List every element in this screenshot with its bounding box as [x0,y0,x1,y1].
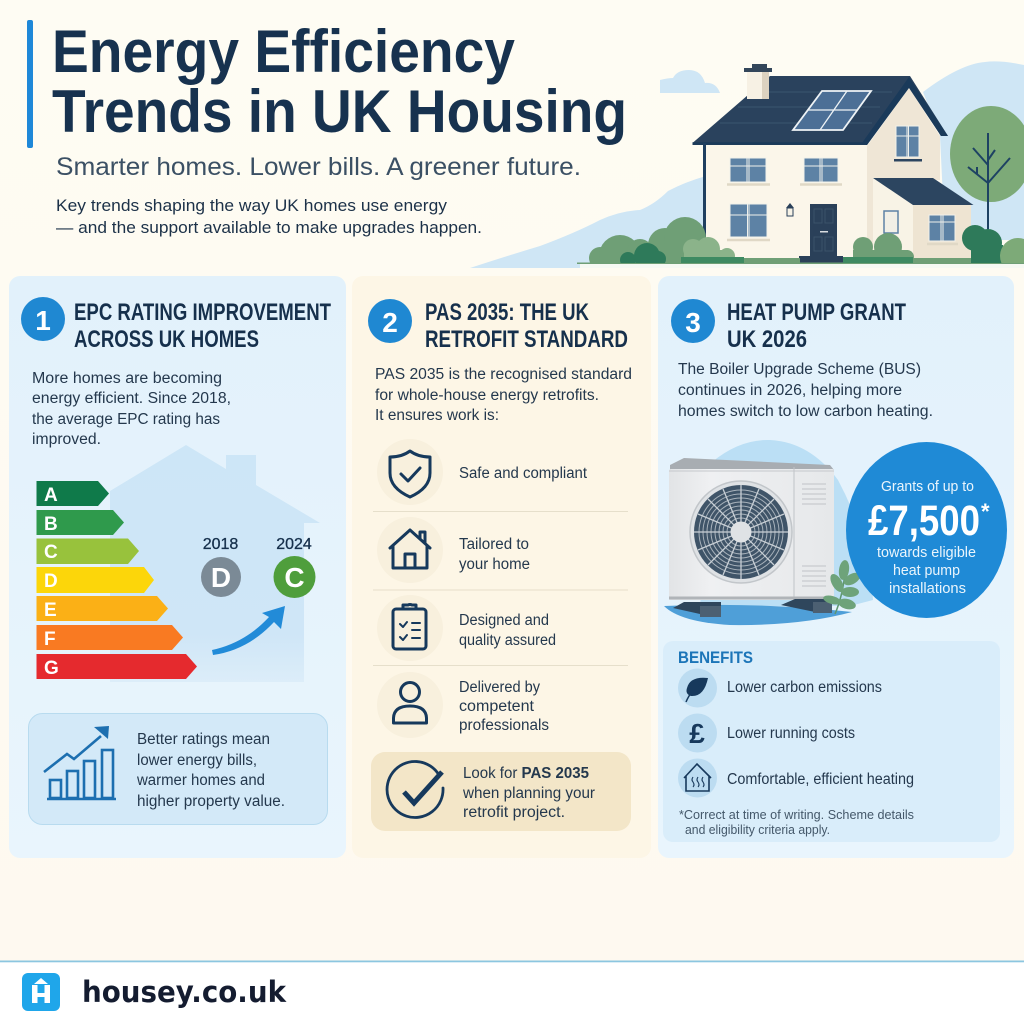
panel 2 intro [375,366,632,424]
panel 3 heading: HEAT PUMP GRANT [727,299,906,326]
subtitle: Smarter homes. Lower bills. A greener future. [56,153,581,181]
divider [373,589,628,591]
callout text: Better ratings mean [137,731,270,748]
main roof [692,76,948,145]
callout text: warmer homes and [136,772,265,789]
grant badge: heat pump [893,563,960,579]
2024 rating: 2024 [276,536,312,553]
number badge 1: 1 [35,305,51,336]
left shrub base [681,257,744,263]
item: designed and quality assured: quality assured [459,632,556,649]
2024 rating: C [284,562,305,593]
item: tailored to your home: your home [459,556,530,573]
divider [373,664,628,666]
footnote [679,808,914,837]
grant badge: £7,500 [868,497,980,545]
backdrop blob [700,440,873,606]
band A: A [44,485,58,506]
item: safe and compliant [377,439,588,505]
title [52,18,627,145]
main wall [705,143,868,263]
panel 1: EPC rating improvement [9,276,346,858]
item: delivered by competent professionals: Delivered by [459,679,540,696]
icon: check circle [387,761,443,817]
gable wall [867,88,940,180]
left shrub group [589,217,706,262]
grant badge: Grants of up to [881,479,974,495]
panel 3 intro: The Boiler Upgrade Scheme (BUS) [678,361,921,378]
item: designed and quality assured: Designed and [459,612,549,629]
footnote: and eligibility criteria apply. [685,823,830,837]
logo icon [22,973,60,1011]
gable sill [894,159,922,162]
pale strip under ground [580,264,1024,268]
callout text: when planning your [462,785,595,802]
item: tailored to your home: Tailored to [459,536,529,553]
benefit: lower costs: £ [689,718,705,749]
title: Trends in UK Housing [52,78,627,145]
band E [36,596,168,621]
band B [36,510,124,535]
icon: rising bar chart [44,726,116,799]
window sills [727,184,958,244]
grant badge: towards eligible [877,545,976,561]
downpipe [703,143,706,241]
door [799,204,843,263]
grant badge: * [981,499,990,524]
benefits box [663,641,1000,842]
band D [36,567,154,593]
2018 rating [201,536,241,597]
callout: look for PAS 2035 [371,752,631,831]
intro text: Key trends shaping the way UK homes use energy [56,197,448,215]
ground [577,258,1024,264]
arrow: improvement [212,606,285,655]
chimney [744,64,772,99]
fan [690,481,792,583]
mounting feet [673,599,832,617]
footer bar [0,960,1024,1024]
item: safe and compliant: Safe and compliant [459,465,588,482]
callout text: retrofit project. [463,804,565,821]
background hill left [470,176,706,268]
left light shrub [683,237,735,257]
extension wall [867,178,971,263]
grant badge: installations [889,581,966,597]
divider [373,510,628,512]
band B: B [44,514,58,535]
benefit: lower costs [678,714,855,752]
number badge 3: 3 [685,307,701,338]
panel 2 heading [425,299,628,353]
item: delivered by competent professionals: competent [459,698,535,715]
panel 3 intro: continues in 2026, helping more [678,382,902,399]
panel 3: heat pump grant [658,276,1014,858]
grant badge [846,442,1007,618]
panel 2 heading: RETROFIT STANDARD [425,326,628,353]
2018 rating: D [211,562,231,593]
windows [730,126,955,241]
band A [36,481,109,506]
callout text: lower energy bills, [137,752,257,769]
number badge 2: 2 [382,307,398,338]
2024 rating [274,536,316,598]
benefits heading: BENEFITS [678,648,753,667]
band C: C [44,542,58,563]
footnote: *Correct at time of writing. Scheme details [679,808,914,822]
benefit: lower carbon: Lower carbon emissions [727,679,882,696]
panel 1 intro: improved. [32,431,101,448]
hero illustration: house and landscape [470,61,1024,277]
right light shrub [1000,238,1024,263]
band C [36,538,139,564]
panel 2: PAS 2035 [352,276,651,858]
centre shrub group [853,233,914,258]
band F [36,625,183,650]
shrubs [589,217,1024,263]
item: delivered by competent professionals [377,672,549,738]
plant [822,559,862,614]
callout text [136,731,285,810]
item: tailored to your home [377,517,530,583]
panel 3 heading [727,299,906,353]
panel 1 heading: EPC RATING IMPROVEMENT [74,299,331,326]
number badge 2 [368,299,412,343]
centre shrub base [843,257,913,263]
panel 2 intro: PAS 2035 is the recognised standard [375,366,632,383]
wall lamp [786,203,794,216]
band G: G [44,658,59,679]
small side window [884,211,898,233]
band G [36,654,197,679]
tree [950,106,1024,232]
panel 1 intro: the average EPC rating has [32,411,220,428]
header accent bar [27,20,33,148]
EPC rating bars [36,481,197,679]
benefit: lower costs: Lower running costs [727,725,855,742]
right dark shrub [962,225,1003,265]
callout: better ratings [28,714,328,824]
panel 3 intro [678,361,933,420]
cloud [660,70,720,93]
extension roof [873,178,974,205]
number badge 1 [21,297,65,341]
panel 3 intro: homes switch to low carbon heating. [678,403,933,420]
band F: F [44,629,56,650]
benefit: comfortable heating: Comfortable, efficient heating [727,771,914,788]
benefit: lower carbon [678,668,882,708]
solar panel [793,91,871,130]
benefit: comfortable heating [678,758,914,798]
band E: E [44,600,57,621]
roof courses [720,92,892,123]
panel 1 intro [32,370,231,448]
panel 2 intro: for whole-house energy retrofits. [375,387,599,404]
number badge 3 [671,299,715,343]
panel 2 intro: It ensures work is: [375,407,499,424]
callout text: higher property value. [137,793,285,810]
background hill right [923,61,1024,240]
window frames [730,126,955,241]
panel 2 heading: PAS 2035: THE UK [425,299,590,326]
panel 1 intro: More homes are becoming [32,370,222,387]
callout text [462,765,595,821]
item: designed and quality assured [377,595,556,661]
roof eave [692,142,867,145]
intro text [56,197,482,237]
gable edge [862,77,948,145]
panel 1 intro: energy efficient. Since 2018, [32,390,231,407]
panel 1 heading [74,299,331,353]
2018 rating: 2018 [203,536,238,553]
website name: housey.co.uk [82,975,287,1009]
item: delivered by competent professionals: professionals [459,717,549,734]
background house shape [110,445,320,682]
panel 3 heading: UK 2026 [727,326,807,353]
band D: D [44,571,58,592]
left dark shrub [620,243,666,263]
ground shadow [664,605,852,625]
intro text: — and the support available to make upgrades happen. [56,219,482,237]
heat pump unit [669,458,834,617]
panel 1 heading: ACROSS UK HOMES [74,326,259,353]
title: Energy Efficiency [52,18,516,85]
callout text: Look for PAS 2035 [463,765,589,782]
